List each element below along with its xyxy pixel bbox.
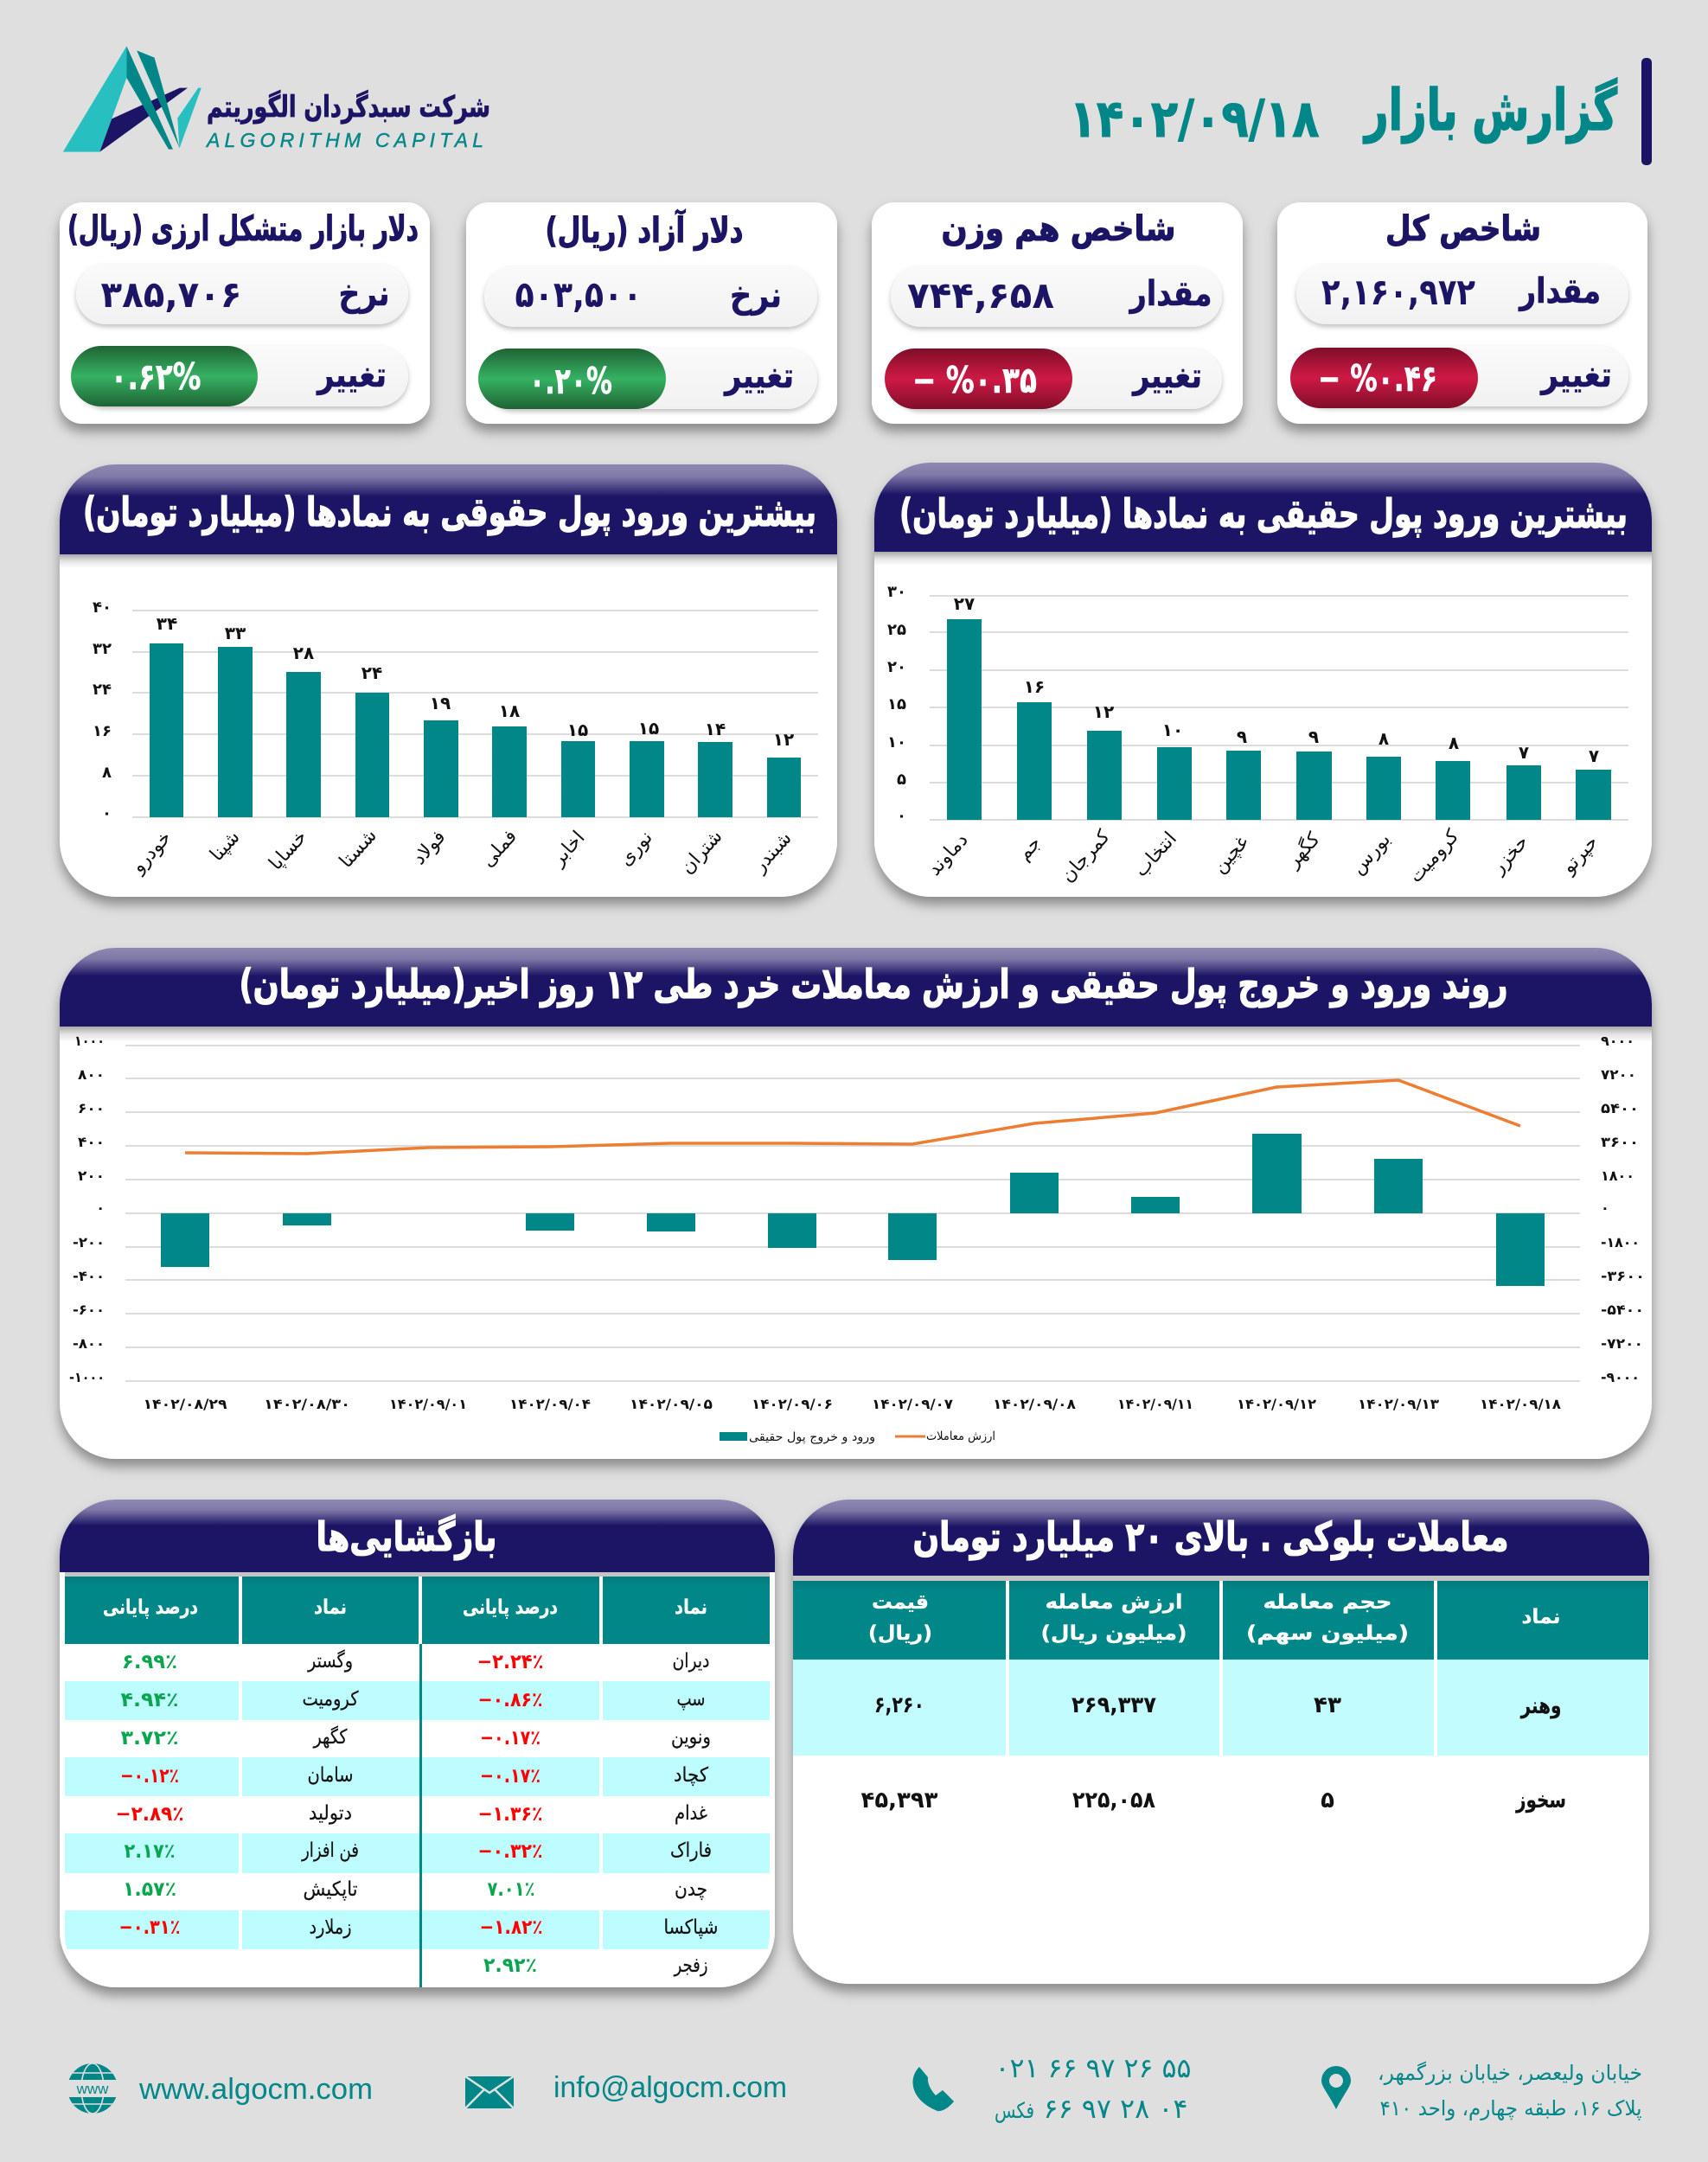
right axis: ۰ <box>1601 1199 1609 1216</box>
change pill <box>885 349 1222 409</box>
symbols column 2: سامان <box>308 1764 353 1787</box>
table header: درصد پایانی <box>103 1596 198 1619</box>
bar chart: ۱۰ <box>887 733 906 752</box>
bar chart: شبندر <box>748 828 796 877</box>
symbols column 1: کچاد <box>674 1764 708 1787</box>
value pill <box>484 266 817 327</box>
bar chart: خودرو <box>127 827 176 878</box>
change pill <box>71 346 408 406</box>
bar chart: ۷ <box>1589 745 1599 766</box>
right axis: ۹۰۰۰ <box>1601 1033 1634 1049</box>
table header: (میلیون ریال) <box>1041 1622 1187 1645</box>
percent column 1: −۱.۸۲٪ <box>479 1916 543 1939</box>
change pill: − %۰.۳۵ <box>912 359 1037 401</box>
symbols column 1: شپاکسا <box>664 1916 718 1939</box>
value pill: ۵۰۳,۵۰۰ <box>515 273 642 316</box>
symbols column 2: کرومیت <box>303 1688 359 1711</box>
table header: (میلیون سهم) <box>1246 1622 1409 1645</box>
change pill <box>478 349 817 409</box>
panel: legal money inflow chart <box>60 464 837 897</box>
logo mark <box>63 46 202 152</box>
symbols column 1: غدام <box>675 1802 707 1825</box>
right axis: -۵۴۰۰ <box>1601 1302 1644 1318</box>
percent column 1: −۰.۱۷٪ <box>480 1727 541 1749</box>
right axis: ۵۴۰۰ <box>1601 1100 1639 1116</box>
bar chart: ۳۰ <box>887 583 906 601</box>
bar chart: ۲۵ <box>887 621 906 639</box>
trade value line <box>185 1080 1520 1154</box>
panel header: بیشترین ورود پول حقوقی به نمادها (میلیارد تومان) <box>83 489 816 536</box>
date axis: ۱۴۰۲/۰۹/۰۴ <box>509 1396 591 1412</box>
bar chart: ۱۹ <box>430 693 451 713</box>
bar chart: ۳۲ <box>93 640 112 658</box>
card heading: شاخص هم وزن <box>941 209 1176 249</box>
date axis <box>144 1396 1561 1412</box>
table header: ارزش معامله <box>1045 1591 1183 1614</box>
bar chart: خساپا <box>265 826 311 874</box>
bar chart <box>887 583 1628 887</box>
bar chart: ۲۷ <box>954 593 975 614</box>
symbols column 1: چدن <box>675 1878 707 1901</box>
change pill: تغییر <box>1131 356 1202 396</box>
legend <box>720 1430 995 1444</box>
phone number: ۰۲۱ ۶۶ ۹۷ ۲۶ ۵۵ <box>995 2053 1192 2084</box>
percent column 1: −۰.۱۷٪ <box>480 1765 541 1788</box>
card: free dollar <box>466 202 837 424</box>
percent column 2: ۲.۱۷٪ <box>125 1840 175 1863</box>
value pill <box>1296 264 1628 324</box>
bar chart: ۰ <box>102 804 112 822</box>
symbols column 1 <box>664 1650 718 1977</box>
bar chart: ۱۶ <box>1024 676 1045 697</box>
right axis: -۳۶۰۰ <box>1601 1268 1645 1284</box>
table header: نماد <box>1522 1606 1560 1628</box>
title accent bar <box>1641 58 1652 165</box>
legend: ورود و خروج پول حقیقی <box>749 1430 875 1444</box>
bar chart: ۰ <box>897 807 906 825</box>
company name latin: ALGORITHM CAPITAL <box>205 129 483 151</box>
panel: block trades table <box>793 1500 1649 1984</box>
percent column 2: −۰.۳۱٪ <box>119 1916 180 1939</box>
bar chart: جم <box>1014 832 1046 865</box>
symbols column 1: فاراک <box>670 1839 712 1862</box>
card heading: شاخص کل <box>1385 209 1541 249</box>
card: total index <box>1277 202 1647 424</box>
left axis: ۲۰۰ <box>78 1167 105 1184</box>
card heading: دلار بازار متشکل ارزی (ریال) <box>67 209 419 249</box>
bar chart: ۹ <box>1308 726 1319 747</box>
bar chart: حپرتو <box>1558 831 1602 879</box>
legend: ارزش معاملات <box>926 1430 995 1443</box>
table header: نماد <box>675 1596 707 1619</box>
symbols column 2: فن افزار <box>301 1839 359 1862</box>
change pill: تغییر <box>1539 355 1612 395</box>
bar chart: دماوند <box>924 829 973 880</box>
value pill <box>891 266 1222 327</box>
percent column 1: ۲.۹۲٪ <box>483 1954 537 1977</box>
date axis: ۱۴۰۲/۰۹/۰۷ <box>872 1396 953 1412</box>
table header: نماد <box>314 1596 347 1619</box>
panel header <box>874 463 1652 552</box>
bar chart: ۳۳ <box>225 623 246 643</box>
bar chart: ۸ <box>1449 732 1459 753</box>
percent column 2: −۰.۱۲٪ <box>120 1765 179 1788</box>
icon: phone <box>912 2067 954 2111</box>
percent column 2: ۶.۹۹٪ <box>122 1651 177 1673</box>
date axis: ۱۴۰۲/۰۹/۰۱ <box>389 1396 467 1412</box>
bar chart: ۴۰ <box>93 598 112 617</box>
date axis: ۱۴۰۲/۰۹/۱۲ <box>1237 1396 1316 1412</box>
panel header <box>60 948 1652 1027</box>
symbols column 1: دیران <box>673 1650 709 1673</box>
value pill: ۲,۱۶۰,۹۷۲ <box>1321 271 1475 313</box>
value pill: ۳۸۵,۷۰۶ <box>100 273 242 316</box>
email: info@algocm.com <box>553 2071 787 2104</box>
row: sakhuz: ۴۵,۳۹۳ <box>861 1788 938 1813</box>
company name persian: شرکت سبدگردان الگوریتم <box>207 90 490 125</box>
bar chart: نوری <box>615 827 657 871</box>
symbols column 1: سپ <box>676 1688 706 1711</box>
bar chart: ۸ <box>102 764 112 782</box>
left axis: ۱۰۰۰ <box>74 1033 105 1049</box>
website: www.algocm.com <box>138 2073 373 2106</box>
real money bars <box>161 1134 1545 1286</box>
bar chart: ۲۸ <box>293 643 314 663</box>
value pill: ۷۴۴,۶۵۸ <box>907 274 1054 317</box>
panel header: بازگشایی‌ها <box>317 1513 496 1560</box>
bar chart: شتران <box>676 826 727 879</box>
left axis: ۰ <box>96 1199 105 1216</box>
symbols column 2: دتولید <box>309 1802 352 1825</box>
address: خیابان ولیعصر، خیابان بزرگمهر، <box>1378 2061 1642 2085</box>
date axis: ۱۴۰۲/۰۸/۲۹ <box>144 1396 227 1412</box>
bar chart: ۲۰ <box>887 658 906 676</box>
bar chart: حخزر <box>1487 831 1533 879</box>
row: sakhuz: سخوز <box>1514 1788 1566 1813</box>
panel: 12-day real money trend chart <box>60 948 1652 1459</box>
change pill: تغییر <box>723 356 794 396</box>
date axis: ۱۴۰۲/۰۸/۳۰ <box>264 1396 350 1412</box>
symbols column 2: زملارد <box>310 1916 351 1939</box>
percent column 1: −۲.۲۴٪ <box>477 1651 543 1673</box>
card: equal weight index <box>872 202 1243 424</box>
icon: location pin <box>1321 2066 1351 2109</box>
date axis: ۱۴۰۲/۰۹/۰۸ <box>993 1396 1076 1412</box>
symbols column 1: زفجر <box>674 1954 707 1977</box>
icon: globe <box>66 2063 119 2114</box>
left axis: -۸۰۰ <box>73 1335 105 1352</box>
bar chart: شستا <box>336 825 381 873</box>
card heading: دلار آزاد (ریال) <box>545 208 744 251</box>
left axis: -۱۰۰۰ <box>69 1369 105 1385</box>
bar chart: ۸ <box>1379 728 1389 749</box>
percent column 2: ۴.۹۴٪ <box>121 1689 178 1711</box>
change pill: − %۰.۴۶ <box>1318 357 1437 400</box>
panel header <box>60 464 837 554</box>
bar chart: فملی <box>477 826 521 872</box>
left axis: -۲۰۰ <box>73 1234 105 1251</box>
bar chart: ۱۶ <box>93 722 112 740</box>
date axis: ۱۴۰۲/۰۹/۰۵ <box>630 1396 713 1412</box>
table header: قیمت <box>872 1591 929 1614</box>
bar chart <box>93 598 818 879</box>
icon: envelope <box>465 2076 514 2108</box>
value pill: نرخ <box>339 274 389 314</box>
symbols column 2 <box>301 1649 359 1939</box>
row: vhonar: ۶,۲۶۰ <box>874 1692 924 1718</box>
symbols column 1: ونوین <box>671 1726 711 1749</box>
fax number: ۶۶ ۹۷ ۲۸ ۰۴ <box>1043 2094 1188 2125</box>
row: vhonar <box>874 1692 1562 1719</box>
symbols column 2: کگهر <box>313 1725 348 1749</box>
bar chart: ۲۴ <box>361 662 382 683</box>
value pill: مقدار <box>1518 272 1601 311</box>
panel: real money inflow chart <box>874 463 1652 897</box>
bar chart: ۱۵ <box>638 718 659 739</box>
percent column 1 <box>477 1651 543 1977</box>
right axis: -۱۸۰۰ <box>1601 1234 1640 1251</box>
combo chart <box>69 1033 1645 1444</box>
left axis <box>69 1033 105 1385</box>
bar chart: غچین <box>1209 832 1253 878</box>
symbols column 2: وگستر <box>307 1649 353 1673</box>
bar chart: ۲۴ <box>93 681 112 699</box>
table header <box>103 1596 707 1619</box>
bar chart: انتخاب <box>1130 828 1181 881</box>
bar chart: شپنا <box>206 827 245 866</box>
bar chart: ۵ <box>897 771 906 789</box>
row: sakhuz: ۵ <box>1321 1788 1334 1813</box>
row: vhonar: وهنر <box>1519 1693 1562 1719</box>
panel: market reopenings table <box>60 1500 775 1987</box>
percent column 1: −۰.۳۲٪ <box>477 1840 543 1863</box>
date axis: ۱۴۰۲/۰۹/۱۱ <box>1117 1396 1193 1412</box>
percent column 1: ۷.۰۱٪ <box>488 1878 534 1901</box>
logo <box>63 46 490 152</box>
percent column 1: −۱.۳۶٪ <box>477 1803 543 1826</box>
report title: گزارش بازار <box>1363 77 1617 144</box>
card: organized market dollar <box>60 202 430 424</box>
bar chart: ۱۵ <box>567 720 588 740</box>
value pill: نرخ <box>730 276 782 316</box>
row: vhonar: ۴۳ <box>1314 1692 1341 1718</box>
left axis: ۴۰۰ <box>78 1134 105 1150</box>
footer contact bar <box>66 2053 1642 2125</box>
bar chart: ۱۴ <box>705 719 726 739</box>
panel header: معاملات بلوکی . بالای ۲۰ میلیارد تومان <box>913 1513 1508 1560</box>
bar chart: ۳۴ <box>157 613 177 634</box>
change pill <box>1290 346 1628 408</box>
bar chart: اخابر <box>547 827 590 871</box>
change pill: تغییر <box>316 355 387 395</box>
report date: ۱۴۰۲/۰۹/۱۸ <box>1069 89 1320 150</box>
bar chart: ۱۸ <box>499 700 520 721</box>
bar chart: بورس <box>1347 829 1395 879</box>
bar chart: ۱۲ <box>1093 701 1114 722</box>
right axis <box>1601 1033 1645 1385</box>
bar chart: کگهر <box>1282 828 1325 873</box>
bar chart: ۹ <box>1237 726 1247 747</box>
left axis: -۴۰۰ <box>73 1268 105 1284</box>
left axis: ۸۰۰ <box>78 1066 105 1083</box>
bar chart: کرومیت <box>1405 825 1464 887</box>
row: sakhuz <box>861 1788 1566 1813</box>
table <box>65 1577 770 1987</box>
right axis: -۷۲۰۰ <box>1601 1335 1643 1352</box>
bar chart: ۷ <box>1519 742 1529 763</box>
address: پلاک ۱۶، طبقه چهارم، واحد ۴۱۰ <box>1380 2096 1641 2120</box>
date axis: ۱۴۰۲/۰۹/۰۶ <box>752 1396 833 1412</box>
bar chart: فولاد <box>408 827 450 869</box>
left axis: ۶۰۰ <box>78 1100 105 1116</box>
percent column 1: −۰.۸۶٪ <box>477 1689 543 1711</box>
fax number: فکس <box>995 2098 1034 2123</box>
date axis: ۱۴۰۲/۰۹/۱۳ <box>1358 1396 1439 1412</box>
change pill: ۰.۲۰% <box>529 360 612 402</box>
right axis: ۳۶۰۰ <box>1601 1134 1639 1150</box>
table <box>793 1581 1648 1813</box>
right axis: ۱۸۰۰ <box>1601 1167 1634 1184</box>
table header <box>868 1591 1560 1645</box>
row: vhonar: ۲۶۹,۳۳۷ <box>1071 1692 1156 1718</box>
table header: (ریال) <box>868 1622 932 1645</box>
icon: globe: www <box>76 2081 109 2097</box>
bar chart: کمرجان <box>1057 826 1115 886</box>
percent column 2: ۱.۵۷٪ <box>123 1878 176 1901</box>
percent column 2: −۲.۸۹٪ <box>116 1803 183 1826</box>
symbols column 2: تاپکیش <box>303 1878 358 1901</box>
address <box>1378 2061 1642 2120</box>
bar chart: ۱۵ <box>887 695 906 713</box>
right axis: -۹۰۰۰ <box>1601 1369 1640 1385</box>
bar chart: ۱۲ <box>773 729 794 750</box>
table header: درصد پایانی <box>463 1596 558 1619</box>
left axis: -۶۰۰ <box>73 1302 105 1318</box>
bar chart: ۱۰ <box>1162 720 1183 740</box>
row: sakhuz: ۲۲۵,۰۵۸ <box>1072 1788 1155 1813</box>
percent column 2 <box>116 1651 183 1939</box>
right axis: ۷۲۰۰ <box>1601 1066 1636 1083</box>
value pill <box>76 264 408 324</box>
panel header <box>793 1500 1649 1576</box>
change pill: ۰.۶۲% <box>111 355 201 398</box>
value pill: مقدار <box>1129 274 1212 314</box>
percent column 2: ۳.۷۲٪ <box>121 1727 178 1749</box>
date axis: ۱۴۰۲/۰۹/۱۸ <box>1480 1396 1561 1412</box>
table header: حجم معامله <box>1263 1591 1392 1614</box>
panel header <box>60 1500 775 1572</box>
